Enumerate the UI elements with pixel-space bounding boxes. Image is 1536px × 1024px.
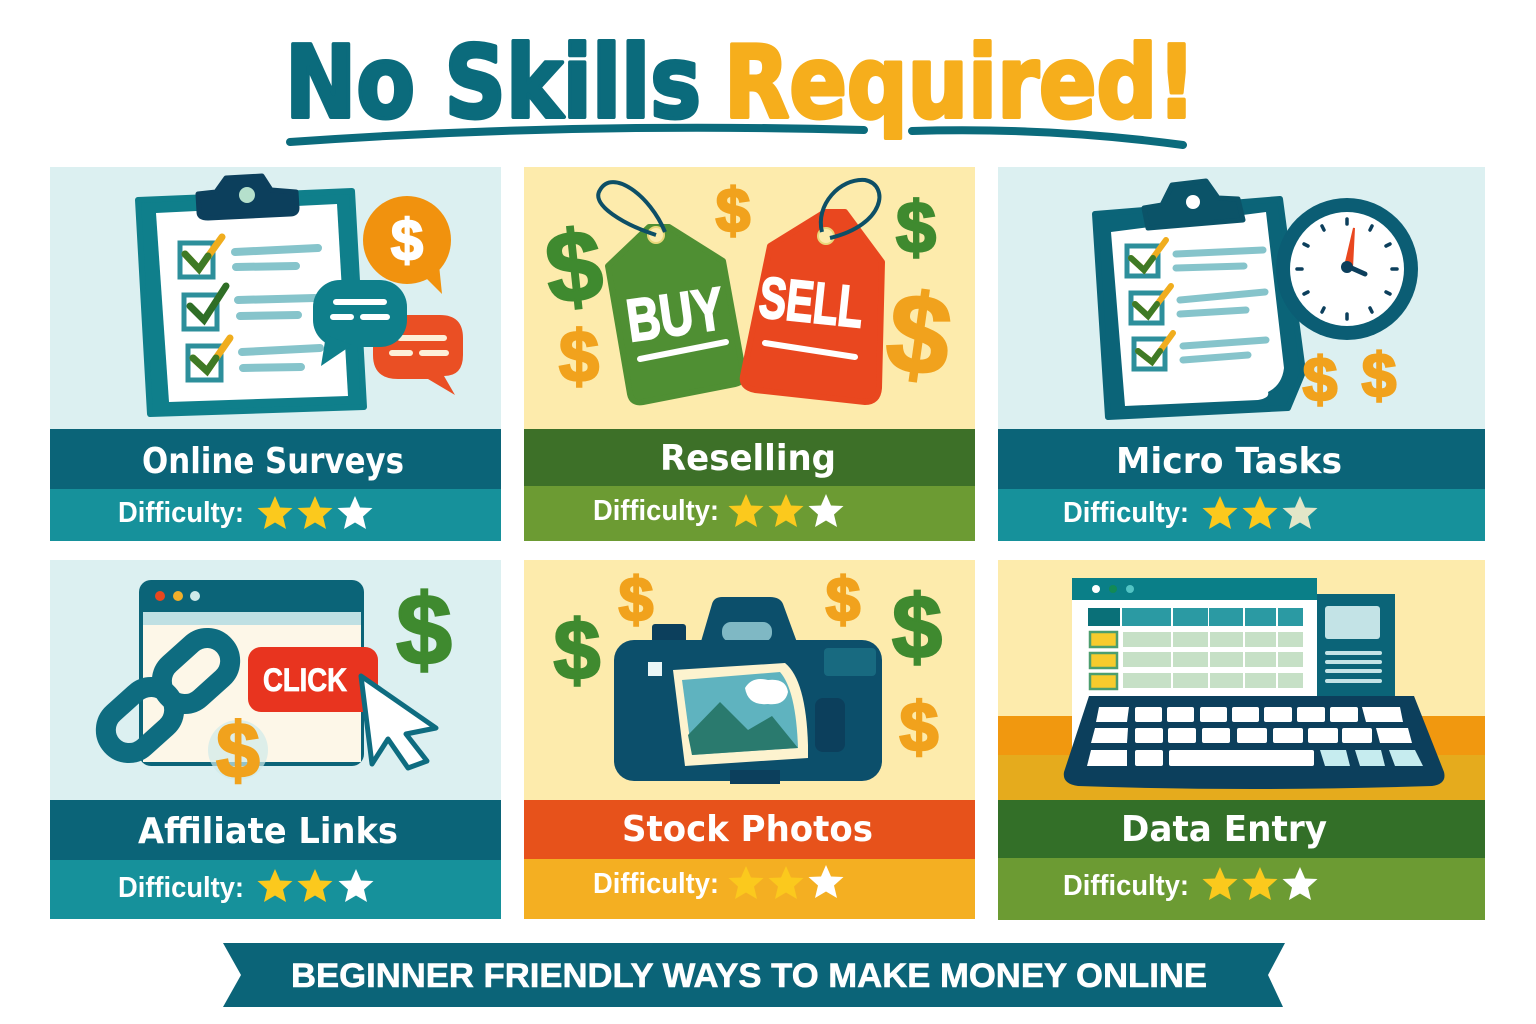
icon: spreadsheet window xyxy=(1072,578,1395,758)
difficulty rating xyxy=(593,494,844,527)
panel: online surveys xyxy=(50,167,501,541)
panel: data entry xyxy=(998,560,1485,920)
icon: dollar signs: $ xyxy=(540,208,608,326)
difficulty rating xyxy=(1063,496,1318,529)
card title: Online Surveys xyxy=(142,441,404,482)
icon: sell tag xyxy=(743,180,882,402)
icon: cursor arrow xyxy=(361,676,436,768)
difficulty rating: Difficulty: xyxy=(118,872,244,904)
difficulty rating xyxy=(118,869,374,904)
panel: stock photos xyxy=(524,560,975,919)
icon: browser window xyxy=(139,580,364,766)
icon: dollar speech bubble xyxy=(363,196,451,294)
footer banner xyxy=(223,943,1285,1007)
icon: buy tag: BUY xyxy=(622,275,728,354)
icon: dollar signs xyxy=(540,177,959,401)
icon: dollar signs: $ xyxy=(216,706,260,794)
icon: dollar signs: $ xyxy=(716,177,750,246)
card title: Data Entry xyxy=(1121,809,1327,850)
icon: red speech bubble xyxy=(373,315,463,395)
icon: dollar signs: $ xyxy=(1362,342,1396,411)
icon: dollar signs: $ xyxy=(826,566,860,635)
card title: Stock Photos xyxy=(622,809,873,850)
icon: dollar signs: $ xyxy=(619,566,653,635)
icon: dollar signs: $ xyxy=(396,574,452,686)
icon: teal speech bubble xyxy=(313,280,407,366)
panel: micro tasks xyxy=(998,167,1485,541)
icon: clock xyxy=(1276,198,1418,340)
icon: dollar signs: $ xyxy=(559,317,599,397)
icon: dollar signs xyxy=(554,566,942,766)
icon: keyboard xyxy=(1064,696,1444,789)
icon: chain link xyxy=(96,628,240,763)
footer banner: BEGINNER FRIENDLY WAYS TO MAKE MONEY ONLINE xyxy=(291,957,1207,995)
icon: camera xyxy=(614,597,882,784)
difficulty rating: Difficulty: xyxy=(1063,870,1189,902)
icon: clipboard with checklist xyxy=(138,176,364,414)
difficulty rating xyxy=(1063,867,1318,902)
icon: dollar signs xyxy=(1303,342,1396,415)
icon: dollar speech bubble: $ xyxy=(391,208,423,273)
icon: dollar signs xyxy=(208,574,452,794)
difficulty rating: Difficulty: xyxy=(118,497,244,529)
icon: dollar signs: $ xyxy=(880,268,959,401)
icon: buy tag xyxy=(598,182,743,402)
title: No Skills xyxy=(285,24,701,141)
icon: dollar signs: $ xyxy=(554,603,600,697)
icon: dollar signs: $ xyxy=(892,578,942,678)
icon: sell tag: SELL xyxy=(756,265,866,340)
card title: Reselling xyxy=(660,438,836,479)
difficulty rating: Difficulty: xyxy=(593,868,719,900)
icon: click button: CLICK xyxy=(263,662,347,698)
panel: reselling xyxy=(524,167,975,541)
card title: Micro Tasks xyxy=(1116,441,1342,482)
panel: affiliate links xyxy=(50,560,501,919)
difficulty rating xyxy=(118,496,372,529)
difficulty rating: Difficulty: xyxy=(1063,497,1189,529)
icon: clipboard xyxy=(1095,181,1303,417)
difficulty rating xyxy=(593,865,844,900)
icon: dollar signs: $ xyxy=(900,688,938,766)
icon: click button xyxy=(248,647,378,712)
card title: Affiliate Links xyxy=(138,811,398,852)
icon: dollar signs: $ xyxy=(1303,346,1337,415)
title xyxy=(285,24,1196,145)
difficulty rating: Difficulty: xyxy=(593,495,719,527)
icon: dollar signs: $ xyxy=(896,188,936,268)
title: Required! xyxy=(724,24,1196,141)
